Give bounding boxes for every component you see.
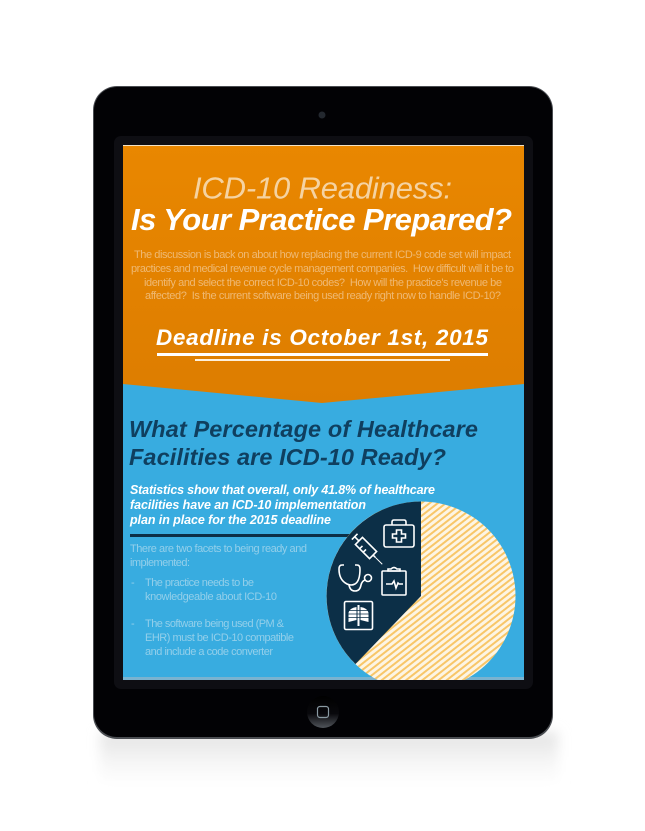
intro paragraph: identify and select the correct ICD-10 codes? How will the practice's revenue be bbox=[144, 277, 502, 289]
camera bbox=[318, 112, 326, 118]
deadline callout: Deadline is October 1st, 2015 bbox=[156, 325, 488, 350]
statistic statement: Statistics show that overall, only 41.8% of healthcare bbox=[130, 483, 435, 497]
deadline callout bbox=[156, 329, 488, 361]
tablet shadow bbox=[100, 732, 558, 784]
bottom strip bbox=[123, 677, 524, 680]
icon: stethoscope bbox=[339, 565, 372, 591]
icon: clipboard bbox=[382, 568, 406, 595]
body text: and include a code converter bbox=[145, 646, 273, 658]
icon: x-ray bbox=[344, 602, 372, 630]
body text: - bbox=[131, 618, 135, 630]
body text: - bbox=[131, 577, 135, 589]
title bbox=[132, 176, 512, 236]
intro paragraph: The discussion is back on about how replacing the current ICD-9 code set will impact bbox=[134, 249, 511, 261]
screen bbox=[123, 145, 524, 690]
body text: There are two facets to being ready and bbox=[130, 543, 307, 555]
body text bbox=[130, 543, 307, 658]
home button bbox=[307, 696, 339, 728]
title: Is Your Practice Prepared? bbox=[131, 202, 512, 237]
pie chart bbox=[326, 502, 516, 690]
section heading bbox=[129, 416, 478, 470]
icon: medical case bbox=[384, 520, 414, 547]
section heading: Facilities are ICD-10 Ready? bbox=[129, 444, 446, 470]
title: ICD-10 Readiness: bbox=[193, 170, 452, 206]
body text: EHR) must be ICD-10 compatible bbox=[145, 632, 294, 644]
icon: syringe bbox=[351, 533, 383, 565]
tablet body bbox=[93, 86, 553, 739]
statistic statement bbox=[129, 483, 435, 527]
orange header banner bbox=[123, 145, 524, 403]
tablet bezel bbox=[114, 136, 533, 689]
statistic statement: facilities have an ICD-10 implementation bbox=[130, 498, 366, 512]
intro paragraph bbox=[131, 249, 514, 302]
divider bbox=[130, 534, 352, 537]
section heading: What Percentage of Healthcare bbox=[129, 416, 478, 442]
body text: The software being used (PM & bbox=[145, 618, 285, 630]
intro paragraph: affected? Is the current software being used ready right now to handle ICD-10? bbox=[145, 290, 501, 302]
intro paragraph: practices and medical revenue cycle management companies. How difficult will it be to bbox=[131, 263, 514, 275]
body text: The practice needs to be bbox=[145, 577, 254, 589]
statistic statement: plan in place for the 2015 deadline bbox=[129, 513, 331, 527]
body text: knowledgeable about ICD-10 bbox=[145, 591, 277, 603]
body text: implemented: bbox=[130, 557, 190, 569]
